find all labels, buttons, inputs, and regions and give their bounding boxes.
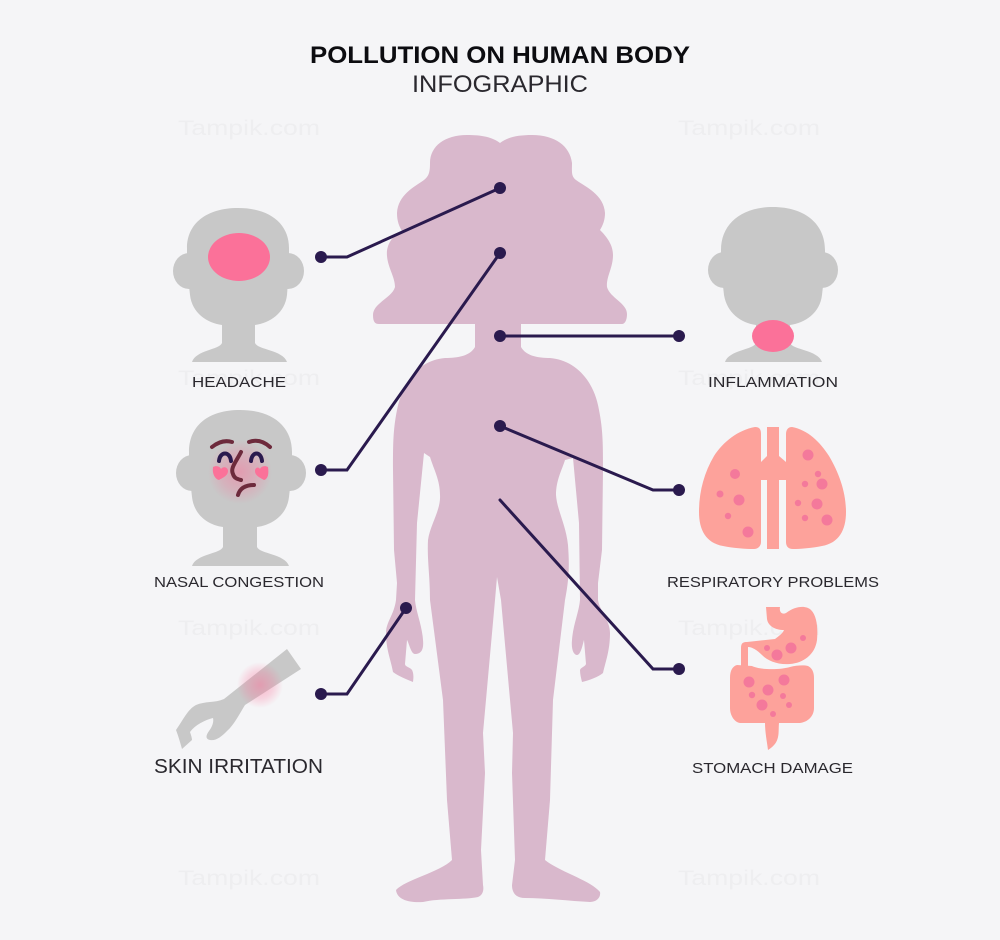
intestine <box>730 665 814 750</box>
nasal congestion label: NASAL CONGESTION <box>154 574 324 591</box>
inflammation head icon <box>708 207 838 362</box>
central body silhouette <box>373 135 627 902</box>
title <box>310 42 690 98</box>
closed eyes <box>219 454 262 461</box>
text: Tampik.com <box>678 117 820 140</box>
text: Tampik.com <box>178 117 320 140</box>
leader line: respiratory problems <box>494 420 685 496</box>
leader line: nasal congestion <box>315 247 506 476</box>
headache head icon <box>173 208 304 362</box>
leader line: stomach damage <box>500 500 685 675</box>
text: Tampik.com <box>178 367 320 390</box>
arm icon with skin irritation <box>176 649 301 749</box>
hair <box>373 135 627 324</box>
stomach and intestine icon <box>730 607 817 750</box>
headache label: HEADACHE <box>192 374 286 391</box>
blush <box>208 440 272 504</box>
eyebrows, nose and mouth <box>212 441 270 495</box>
stomach damage label: STOMACH DAMAGE <box>692 760 853 777</box>
hearts on cheeks <box>213 466 228 480</box>
text: Tampik.com <box>678 867 820 890</box>
inflammation label: INFLAMMATION <box>708 374 838 391</box>
stomach <box>741 607 817 666</box>
skin irritation label: SKIN IRRITATION <box>154 756 323 778</box>
leader line: headache <box>315 182 506 263</box>
headache pain spot <box>208 233 270 281</box>
text: Tampik.com <box>678 367 820 390</box>
text: Tampik.com <box>678 617 820 640</box>
stomach and intestine spots <box>744 635 806 717</box>
respiratory problems label: RESPIRATORY PROBLEMS <box>667 574 879 591</box>
irritated skin patch <box>237 662 283 708</box>
torso, arms and legs <box>386 320 610 902</box>
leader line: inflammation <box>494 330 685 342</box>
text: Tampik.com <box>178 617 320 640</box>
lungs icon <box>699 427 846 549</box>
title: INFOGRAPHIC <box>412 71 588 98</box>
lung spots <box>716 450 832 538</box>
text: Tampik.com <box>178 867 320 890</box>
leader line: skin irritation <box>315 602 412 700</box>
inflamed throat <box>752 320 794 352</box>
nasal congestion head icon <box>176 410 306 566</box>
title: POLLUTION ON HUMAN BODY <box>310 42 690 69</box>
